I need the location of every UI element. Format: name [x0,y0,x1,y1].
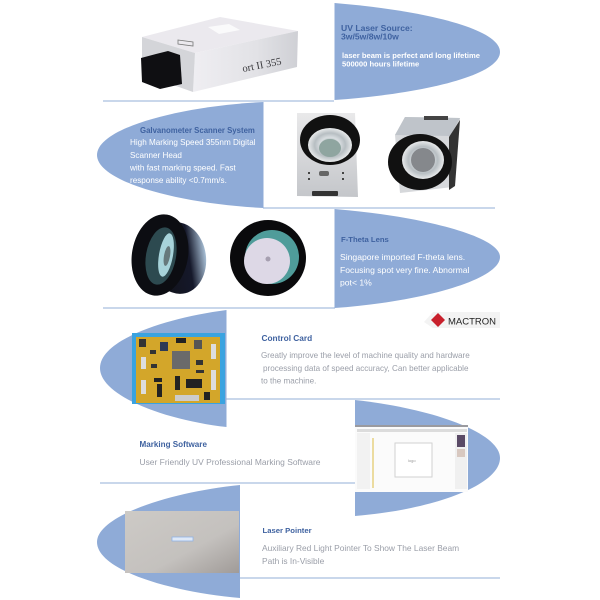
image: software screenshot: logo [408,458,416,463]
text: control card description: processing data of speed accuracy, Can better applicable [263,364,469,373]
image: circuit board [132,333,225,404]
image: laser pointer photo [125,511,239,573]
heading: Control Card: Control Card [262,333,312,343]
image: scanner head angled [388,116,460,193]
image: UV laser module: ort II 355 [241,57,283,75]
text: control card description: to the machine. [261,377,316,386]
text: control card description: Greatly improve the level of machine quality and hardware [261,351,470,360]
panel: F-Theta lens [334,209,500,308]
heading: UV Laser Source: 3w/5w/8w/10w [341,32,399,42]
text: F-theta description: Singapore imported F-theta lens. [340,252,465,262]
blue half ellipse: laser source [334,3,500,100]
heading: F-Theta Lens: F-Theta Lens [341,235,389,244]
panel: UV laser source [334,3,500,100]
blue half ellipse: software [355,400,500,516]
text: F-theta description: Focusing spot very fine. Abnormal [340,265,470,275]
image: UV laser module [141,17,298,92]
text: software description: User Friendly UV Professional Marking Software [140,457,321,467]
text: laser source description: 500000 hours lifetime [342,60,419,68]
logo text: MACTRON [448,316,496,328]
heading: Galvanometer Scanner System: Galvanometer Scanner System [140,126,255,135]
heading: UV Laser Source: UV Laser Source: [341,23,413,33]
panel: laser pointer [97,485,240,598]
blue half ellipse: galvanometer [97,102,264,208]
text: laser pointer description: Auxiliary Red Light Pointer To Show The Laser Beam [262,543,459,553]
text: galvanometer description: Scanner Head [130,151,182,160]
image: scanner head front [297,113,360,197]
image: lens angled [125,210,211,300]
image: lens front [230,220,306,296]
blue half ellipse: f-theta [334,209,500,308]
text: laser pointer description: Path is In-Visible [262,556,325,566]
icon: red diamond mark [431,313,445,327]
laser line mark [172,537,193,541]
divider lines [100,101,500,578]
panel: marking software [140,400,500,516]
text: F-theta description: pot< 1% [340,278,372,288]
text block: laser pointer [262,526,459,566]
image: software screenshot [355,425,468,492]
heading: Marking Software: Marking Software [140,440,207,449]
text: galvanometer description: with fast marking speed. Fast [129,164,236,172]
panel: galvanometer scanner system [97,102,264,208]
logo: MACTRON [424,312,500,328]
panel: control card [100,310,226,427]
heading: Laser Pointer: Laser Pointer [262,526,312,535]
text block: control card [261,333,470,386]
blue half ellipse: control card [100,310,226,427]
text: galvanometer description: High Marking Speed 355nm Digital [130,138,256,147]
blue half ellipse: pointer [97,485,240,598]
text: laser source description: laser beam is perfect and long lifetime [342,51,480,60]
text: galvanometer description: response ability <0.7mm/s. [130,176,227,185]
